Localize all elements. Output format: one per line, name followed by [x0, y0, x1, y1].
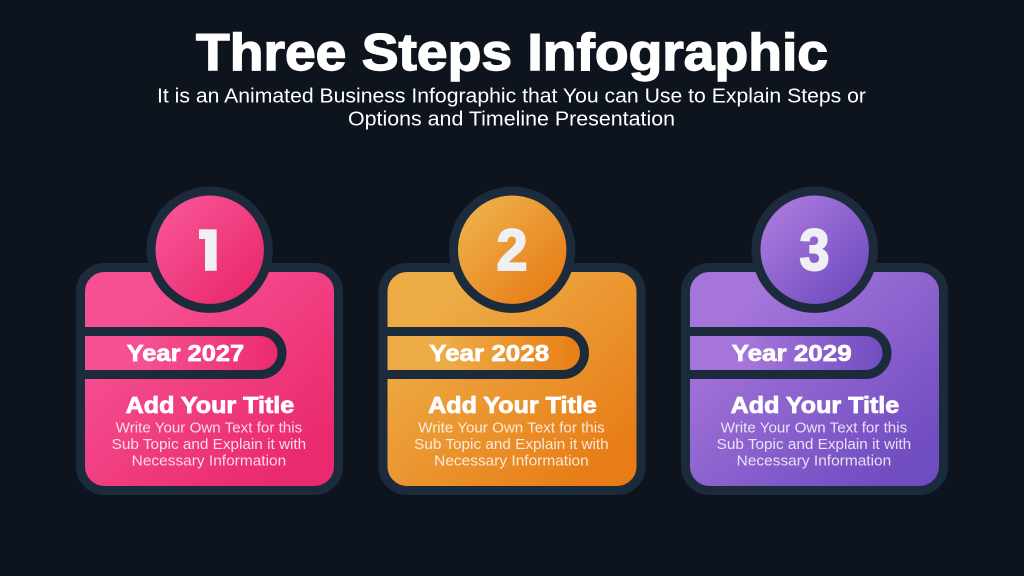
card 1 body: [80, 268, 338, 490]
number badge 1: [151, 191, 268, 308]
card 1 heading: Add Your Title: [126, 392, 294, 418]
year 1 pill: Year 2027: [127, 340, 244, 366]
card 2 text: Necessary Information: [434, 454, 589, 470]
card 2 text: Write Your Own Text for this: [418, 420, 605, 436]
number badge 2: [454, 191, 571, 308]
card 3 text: Sub Topic and Explain it with: [717, 437, 911, 453]
card 1 text: Sub Topic and Explain it with: [112, 437, 306, 453]
panel: step 3: [686, 191, 944, 490]
subtitle: Options and Timeline Presentation: [348, 108, 675, 130]
number badge 3: [756, 191, 873, 308]
panel: step 1: [80, 191, 338, 490]
card 2 text: Sub Topic and Explain it with: [414, 437, 609, 453]
year 2 pill: [388, 332, 584, 374]
card 3 text: Write Your Own Text for this: [721, 420, 907, 436]
year 2 pill: Year 2028: [429, 340, 549, 366]
card 1 text: Necessary Information: [132, 454, 286, 470]
card 2 heading: Add Your Title: [428, 392, 597, 418]
card 2 body: [383, 268, 641, 490]
number badge 1: 1: [189, 218, 229, 284]
card 2 text: [414, 420, 609, 470]
year 1 pill: [85, 332, 282, 374]
number badge 3: 3: [800, 218, 830, 283]
card 1 text: [112, 420, 306, 470]
year 3 pill: Year 2029: [732, 340, 852, 366]
card 3 body: [686, 268, 944, 490]
card 1 text: Write Your Own Text for this: [116, 420, 302, 436]
subtitle: [157, 86, 866, 130]
title: Three Steps Infographic: [196, 24, 828, 82]
number badge 2: 2: [496, 218, 528, 283]
card 3 heading: Add Your Title: [731, 392, 899, 418]
subtitle: It is an Animated Business Infographic that You can Use to Explain Steps or: [157, 86, 866, 108]
year 3 pill: [690, 332, 887, 374]
card 3 text: Necessary Information: [737, 454, 891, 470]
panel: step 2: [383, 191, 641, 490]
card 3 text: [717, 420, 911, 470]
